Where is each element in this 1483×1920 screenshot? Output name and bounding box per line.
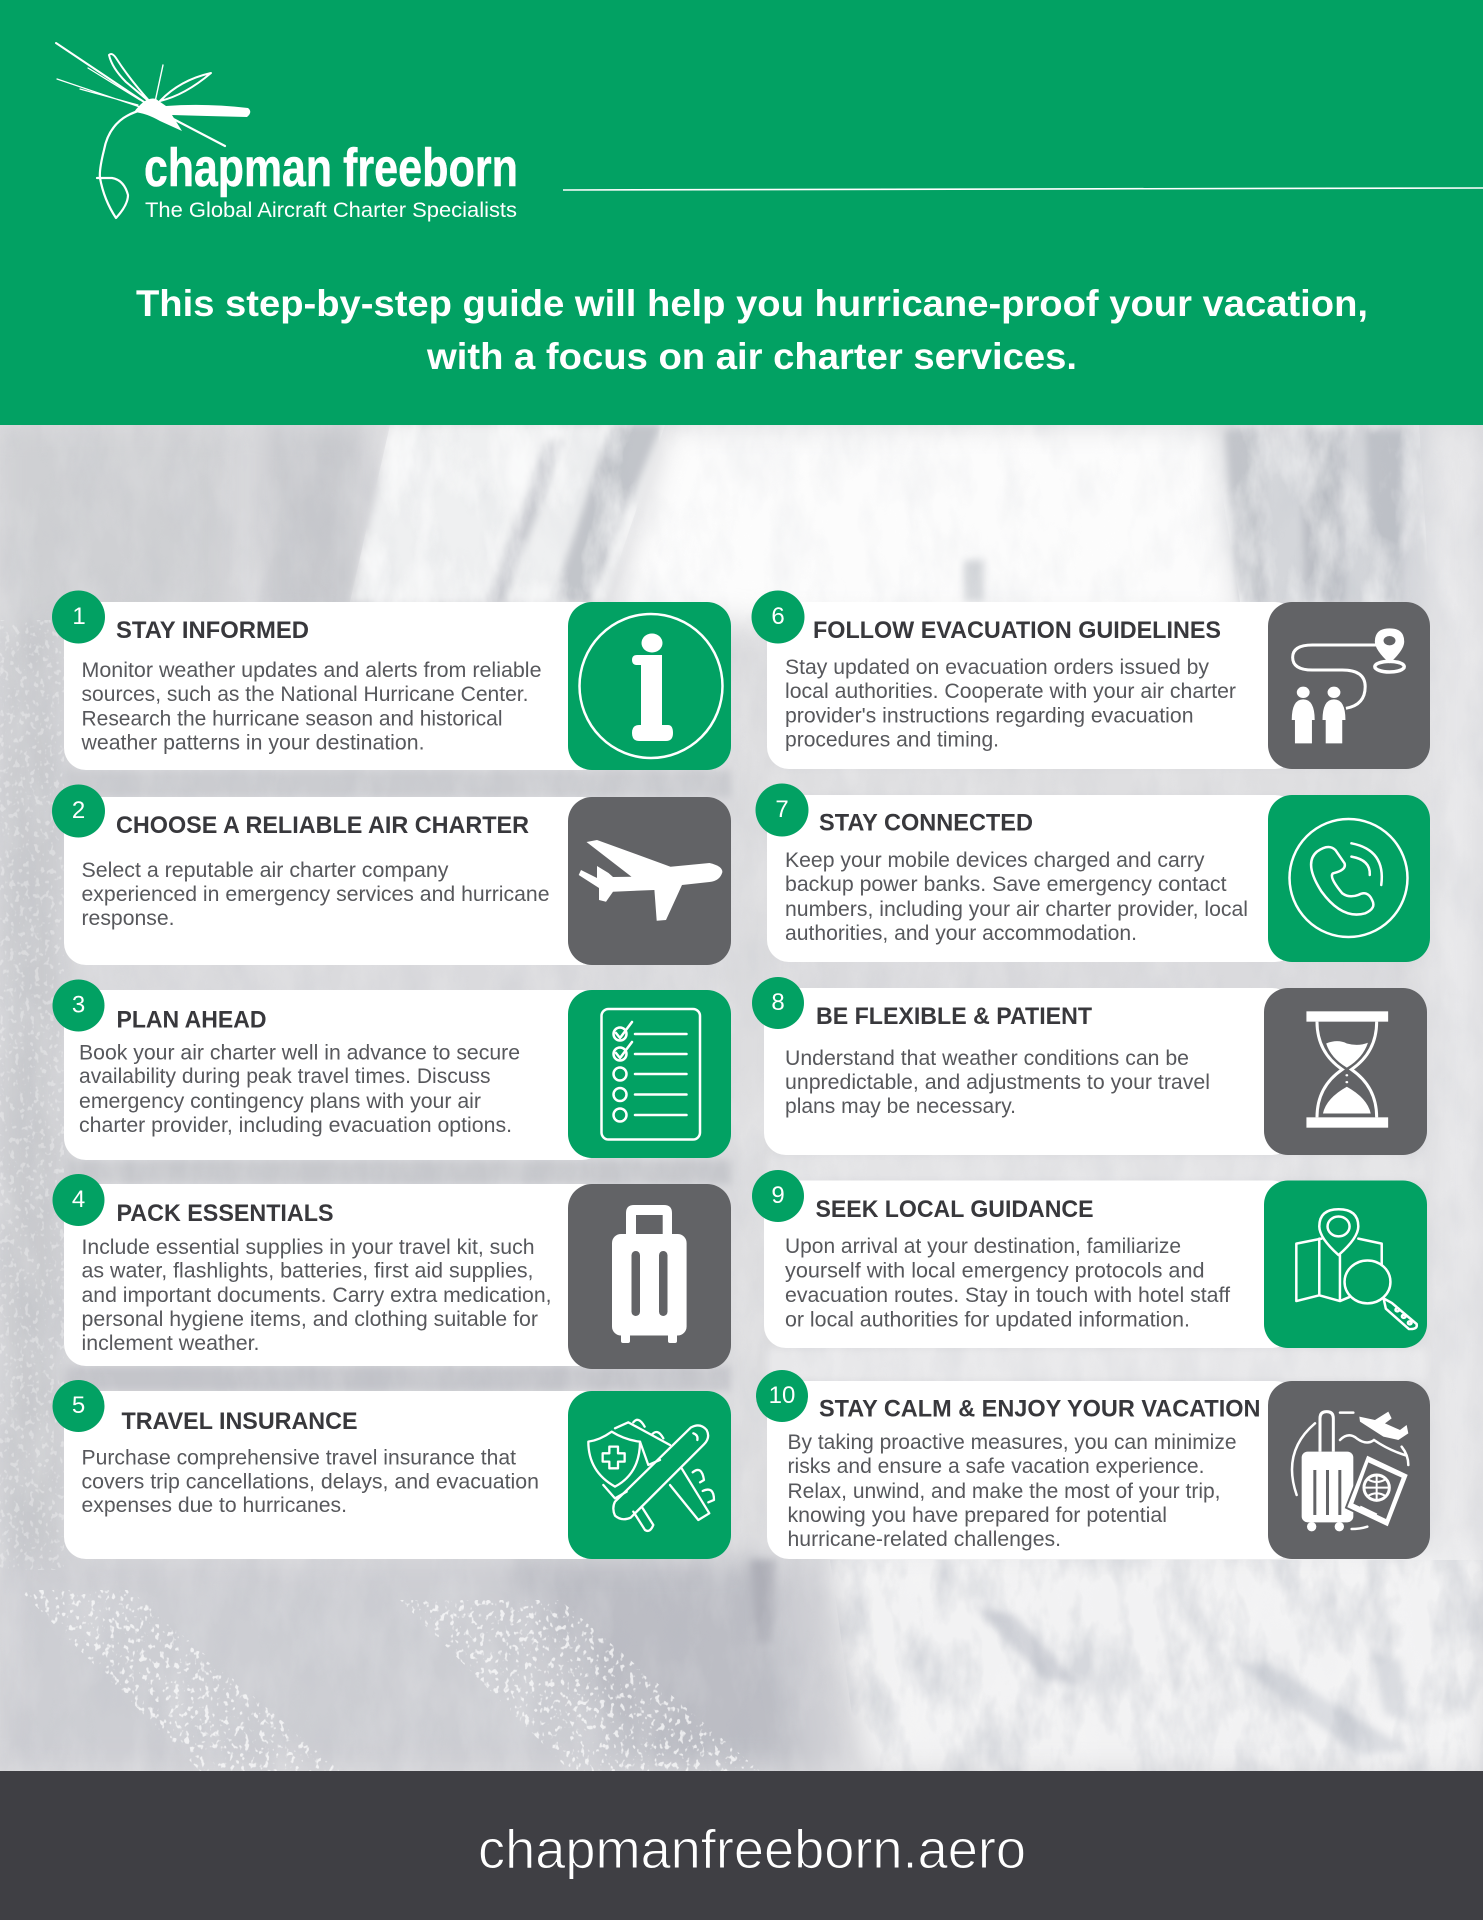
body text: local authorities. Cooperate with your air charter <box>785 680 1236 703</box>
body text: charter provider, including evacuation options. <box>79 1114 512 1137</box>
step number 2 <box>52 784 105 838</box>
panel: step 9 seek local guidance <box>752 1170 1427 1348</box>
step number 6: 6 <box>771 603 785 630</box>
body text: experienced in emergency services and hurricane <box>82 883 550 906</box>
body text <box>82 1446 539 1517</box>
heading: PACK ESSENTIALS <box>116 1200 334 1227</box>
body text: authorities, and your accommodation. <box>785 922 1137 945</box>
step number 10 <box>756 1370 808 1422</box>
body text: knowing you have prepared for potential <box>788 1504 1167 1527</box>
body text: Relax, unwind, and make the most of your trip, <box>788 1480 1220 1503</box>
panel: step 2 choose a reliable air charter <box>52 784 731 965</box>
body text: Research the hurricane season and historical <box>82 708 502 730</box>
icon: luggage, passport and plane <box>1268 1381 1430 1559</box>
icon: map and magnifier <box>1264 1180 1427 1348</box>
body text: plans may be necessary. <box>785 1095 1016 1118</box>
heading: BE FLEXIBLE & PATIENT <box>816 1003 1092 1030</box>
body text: inclement weather. <box>82 1332 260 1355</box>
body text <box>785 1235 1230 1332</box>
body text: covers trip cancellations, delays, and evacuation <box>82 1470 539 1494</box>
icon: hourglass <box>1264 988 1427 1155</box>
title: This step-by-step guide will help you hurricane-proof your vacation, <box>136 283 1368 324</box>
panel: step 6 follow evacuation guidelines <box>752 590 1430 769</box>
icon: evacuation route <box>1268 602 1430 769</box>
body text: risks and ensure a safe vacation experience. <box>788 1455 1204 1478</box>
panel: step 10 stay calm and enjoy your vacation <box>756 1370 1430 1559</box>
body text <box>785 656 1236 752</box>
body text <box>82 859 550 930</box>
body text: Understand that weather conditions can be <box>785 1047 1189 1070</box>
icon: airplane <box>568 797 731 965</box>
logo wordmark: chapman <box>144 138 332 198</box>
step number 9 <box>752 1170 804 1222</box>
body text: Keep your mobile devices charged and carry <box>785 849 1205 872</box>
logo tagline: The Global Aircraft Charter Specialists <box>145 198 517 222</box>
body text: yourself with local emergency protocols and <box>785 1260 1204 1282</box>
step number 9: 9 <box>771 1182 785 1209</box>
footer website: chapmanfreeborn.aero <box>478 1818 1026 1880</box>
heading: STAY CALM & ENJOY YOUR VACATION <box>819 1396 1260 1422</box>
step number 2: 2 <box>72 797 85 824</box>
step number 10: 10 <box>769 1382 795 1409</box>
step number 4 <box>52 1174 104 1226</box>
step number 5: 5 <box>72 1392 85 1419</box>
logo mark: starburst <box>56 43 225 218</box>
body text: Book your air charter well in advance to secure <box>79 1042 520 1064</box>
panel: step 8 be flexible and patient <box>752 977 1427 1155</box>
body text: Purchase comprehensive travel insurance that <box>82 1446 516 1470</box>
step number 7: 7 <box>775 796 789 823</box>
body text <box>788 1431 1236 1551</box>
body text: expenses due to hurricanes. <box>82 1494 347 1517</box>
body text: response. <box>82 907 174 930</box>
body text: numbers, including your air charter provider, local <box>785 898 1248 921</box>
heading: STAY CONNECTED <box>819 810 1033 836</box>
step number 8: 8 <box>771 989 785 1016</box>
body text: weather patterns in your destination. <box>80 732 424 754</box>
heading: CHOOSE A RELIABLE AIR CHARTER <box>116 812 529 839</box>
body text: Stay updated on evacuation orders issued by <box>785 656 1210 679</box>
body text: provider's instructions regarding evacuation <box>785 704 1194 728</box>
panel: step 7 stay connected <box>756 784 1430 962</box>
icon: checklist <box>568 990 731 1158</box>
body text <box>785 849 1248 945</box>
logo: chapman freeborn: freeborn <box>343 138 518 198</box>
body text: procedures and timing. <box>785 728 999 752</box>
header rule <box>563 188 1483 190</box>
icon: insurance shield and plane <box>568 1391 731 1559</box>
heading: FOLLOW EVACUATION GUIDELINES <box>813 617 1221 644</box>
background: hurricane satellite clouds <box>0 425 1483 1771</box>
panel: step 3 plan ahead <box>52 980 731 1160</box>
icon: information <box>568 602 731 770</box>
title: with a focus on air charter services. <box>426 336 1077 377</box>
body text: emergency contingency plans with your air <box>79 1090 481 1113</box>
step number 5 <box>52 1380 104 1432</box>
body text <box>80 659 542 754</box>
icon: phone <box>1268 795 1430 962</box>
body text: Upon arrival at your destination, familiarize <box>785 1235 1181 1258</box>
body text: By taking proactive measures, you can minimize <box>788 1431 1236 1454</box>
logo: chapman freeborn <box>56 43 518 222</box>
body text: backup power banks. Save emergency contact <box>785 873 1227 896</box>
step number 3: 3 <box>72 992 85 1018</box>
body text: sources, such as the National Hurricane Center. <box>82 683 528 706</box>
body text: hurricane-related challenges. <box>788 1528 1061 1551</box>
panel: step 5 travel insurance <box>52 1380 731 1559</box>
panel: step 4 pack essentials <box>52 1174 731 1369</box>
body text: or local authorities for updated information. <box>785 1308 1190 1332</box>
step number 3 <box>52 980 104 1032</box>
heading: PLAN AHEAD <box>116 1006 266 1034</box>
step number 8 <box>752 977 804 1029</box>
step number 4: 4 <box>72 1186 85 1213</box>
heading: STAY INFORMED <box>116 617 309 644</box>
step number 6 <box>752 590 804 644</box>
body text <box>79 1042 520 1137</box>
body text: Include essential supplies in your travel kit, such <box>82 1236 534 1259</box>
title <box>136 283 1368 377</box>
body text <box>82 1236 552 1355</box>
body text: Select a reputable air charter company <box>82 859 449 882</box>
body text: availability during peak travel times. Discuss <box>79 1065 490 1088</box>
footer band <box>0 1771 1483 1920</box>
heading: SEEK LOCAL GUIDANCE <box>816 1196 1094 1223</box>
body text <box>785 1047 1210 1118</box>
step number 7 <box>756 784 808 836</box>
header band <box>0 0 1483 425</box>
body text: personal hygiene items, and clothing suitable for <box>82 1308 538 1331</box>
body text: Monitor weather updates and alerts from reliable <box>82 659 542 682</box>
panel: step 1 stay informed <box>52 590 731 770</box>
body text: unpredictable, and adjustments to your travel <box>785 1071 1210 1094</box>
heading: TRAVEL INSURANCE <box>122 1408 358 1435</box>
body text: and important documents. Carry extra medication, <box>82 1284 552 1307</box>
step number 1: 1 <box>72 603 86 630</box>
step number 1 <box>52 590 105 644</box>
icon: suitcase <box>568 1184 731 1369</box>
body text: as water, flashlights, batteries, first aid supplies, <box>82 1260 534 1282</box>
body text: evacuation routes. Stay in touch with hotel staff <box>785 1284 1230 1307</box>
